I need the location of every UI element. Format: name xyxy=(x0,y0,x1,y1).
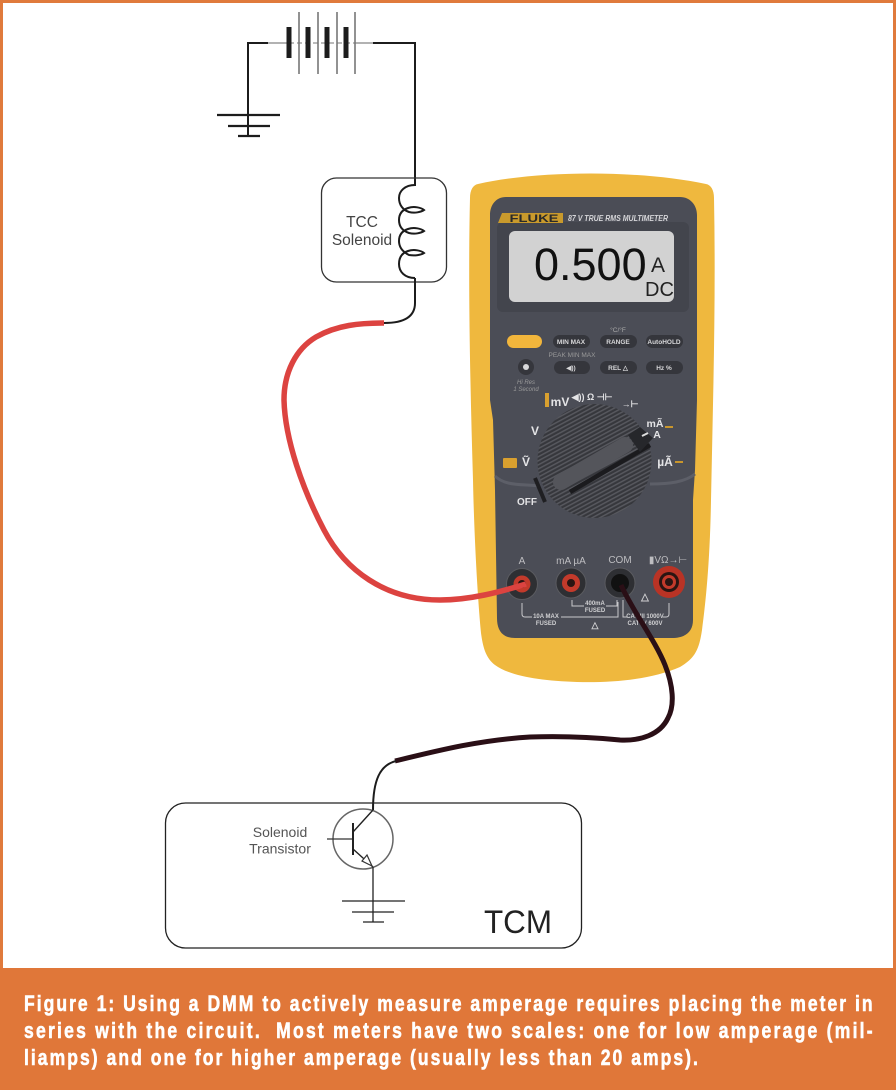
function buttons: AutoHOLD xyxy=(647,339,681,346)
dial labels: OFF xyxy=(517,497,537,508)
caption band xyxy=(0,968,896,1090)
function buttons: °C/°F xyxy=(610,326,626,334)
jack labels: COM xyxy=(608,555,632,566)
model label: 87 V TRUE RMS MULTIMETER xyxy=(568,214,668,223)
dial labels: A xyxy=(653,429,661,441)
function buttons: 1 Second xyxy=(513,387,539,393)
solenoid label: TCC xyxy=(346,214,378,231)
jack ratings text: CAT IV 600V xyxy=(628,621,662,627)
jack ratings text: 10A MAX xyxy=(533,614,559,620)
function buttons: REL △ xyxy=(608,365,629,372)
dial labels: µÃ xyxy=(657,454,673,469)
jack ratings text: △ xyxy=(640,592,649,603)
jack labels: A xyxy=(519,556,526,567)
caption text: series with the circuit. Most meters have two scales: one for low amperage (mil- xyxy=(24,1019,873,1044)
jack ratings text: FUSED xyxy=(585,608,606,614)
function buttons: PEAK MIN MAX xyxy=(549,352,596,359)
LCD display xyxy=(509,231,674,302)
dark face panel xyxy=(490,197,697,638)
off notch xyxy=(535,478,545,502)
function buttons xyxy=(507,326,683,393)
transistor label: Transistor xyxy=(249,840,311,856)
caption text xyxy=(24,992,873,1071)
rotary dial xyxy=(535,404,653,518)
jack ratings text: CAT III 1000V xyxy=(626,614,664,620)
Fluke logo xyxy=(498,213,563,225)
thin lead to transistor xyxy=(373,761,396,810)
function buttons: RANGE xyxy=(606,339,630,346)
dial labels: mV xyxy=(551,395,569,409)
caption text: Figure 1: Using a DMM to actively measure amperage requires placing the meter in xyxy=(24,992,873,1017)
TCC solenoid box xyxy=(322,178,446,282)
jack ratings text: FUSED xyxy=(536,621,557,627)
TCM box xyxy=(166,803,582,948)
function buttons: Hz % xyxy=(656,365,672,372)
solenoid coil xyxy=(399,185,424,278)
jack ratings brackets xyxy=(522,600,669,617)
TCM label: TCM xyxy=(484,904,552,940)
jack ratings text xyxy=(533,592,664,630)
LCD display: A xyxy=(651,254,665,277)
jack ratings text: 400mA xyxy=(585,601,605,607)
red test lead xyxy=(284,323,526,600)
black test lead xyxy=(395,585,672,761)
yellow case xyxy=(469,174,715,682)
panel ridge xyxy=(495,474,695,486)
dial labels: mÃ xyxy=(647,417,664,430)
black lead from solenoid xyxy=(384,278,415,323)
LCD display: DC xyxy=(645,279,674,301)
function buttons: Hi Res xyxy=(517,380,535,386)
dial labels: ◀)) Ω ⊣⊢ xyxy=(571,392,613,402)
jack ratings text: △ xyxy=(591,620,600,630)
solenoid label: Solenoid xyxy=(332,232,392,249)
multimeter xyxy=(469,174,715,682)
battery and ground circuit xyxy=(217,12,415,186)
function buttons: ◀)) xyxy=(565,365,576,372)
jack labels xyxy=(519,555,687,567)
input jacks xyxy=(506,566,685,600)
dial labels: Ṽ xyxy=(522,454,530,469)
caption text: liamps) and one for higher amperage (usually less than 20 amps). xyxy=(24,1046,698,1071)
LCD display: 0.500 xyxy=(534,239,647,290)
transistor label: Solenoid xyxy=(253,824,307,840)
jack labels: mA µA xyxy=(556,556,586,567)
jack labels: ▮VΩ→⊢ xyxy=(649,555,687,566)
transistor ground xyxy=(342,867,405,922)
dial pointer xyxy=(561,427,653,492)
dial labels xyxy=(503,392,683,508)
transistor symbol xyxy=(327,809,393,869)
display bezel xyxy=(497,222,689,312)
function buttons: MIN MAX xyxy=(557,339,586,346)
Fluke logo: FLUKE xyxy=(510,213,558,225)
dial labels: →⊢ xyxy=(622,399,639,409)
dial labels: V xyxy=(531,424,539,438)
